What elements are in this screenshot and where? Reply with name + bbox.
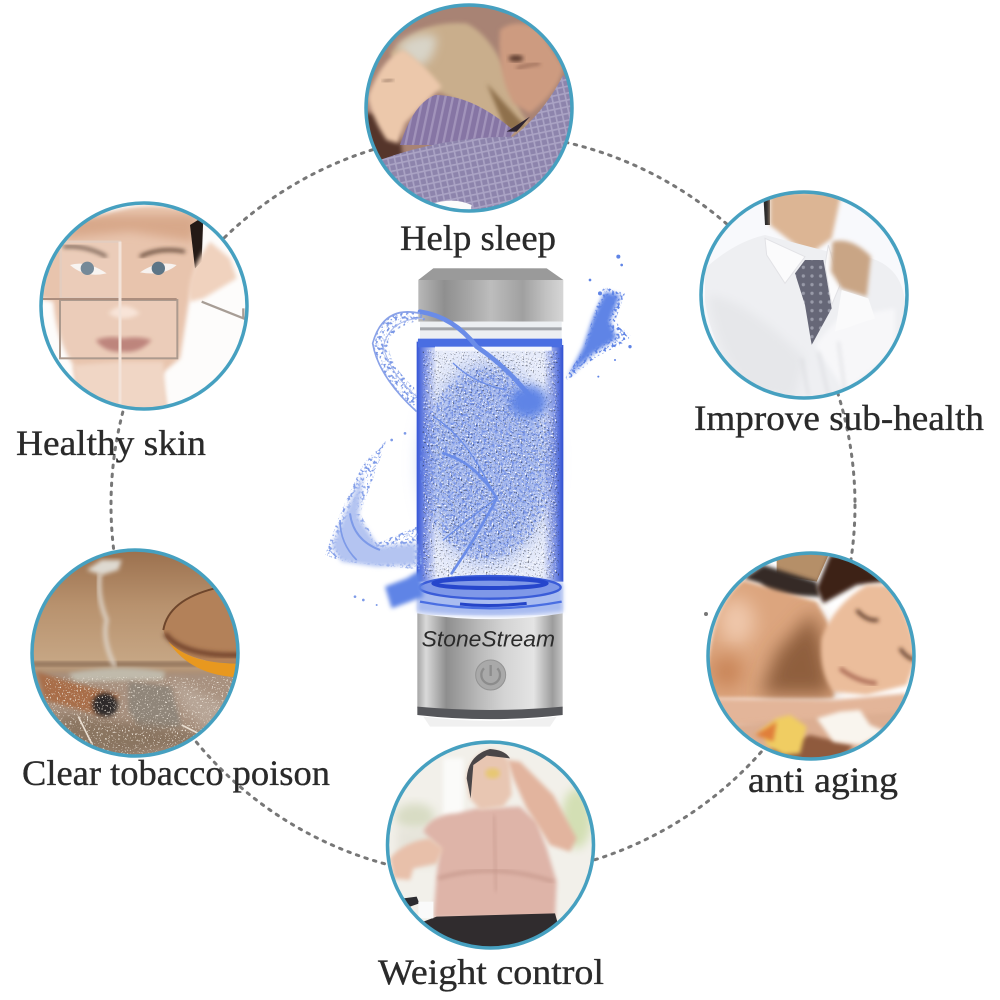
power button	[476, 660, 506, 690]
glass body	[417, 338, 563, 615]
panel: improve sub-health photo	[695, 185, 915, 405]
stray dot near anti aging	[704, 612, 708, 616]
heading: Weight control: Weight control	[378, 952, 604, 992]
water streams through glass	[420, 312, 530, 573]
upper-left water loop	[373, 312, 427, 412]
heading: Healthy skin: Healthy skin	[16, 423, 206, 463]
panel: weight control photo	[380, 735, 600, 955]
heading: Improve sub-health: Improve sub-health	[694, 398, 984, 438]
bubbles in water	[420, 350, 559, 578]
bottle base	[417, 613, 563, 712]
heading: anti aging: anti aging	[748, 760, 898, 800]
panel: anti aging photo	[700, 545, 920, 765]
heading: Clear tobacco poison: Clear tobacco poison	[22, 753, 330, 793]
panel: clear tobacco photo	[25, 540, 245, 760]
hydrogen water bottle with splash	[325, 255, 632, 727]
lower-left splash	[325, 432, 423, 608]
panel: healthy skin photo	[39, 201, 249, 411]
bottle cap	[418, 268, 563, 322]
glass neck	[420, 322, 562, 339]
heading: Help sleep: Help sleep	[400, 218, 556, 258]
upper-right splash	[565, 255, 632, 380]
panel: help sleep photo	[360, 0, 580, 220]
bottom water ring	[417, 576, 563, 616]
dotted connecting ring	[111, 133, 855, 877]
brand name: StoneStream	[422, 627, 555, 652]
